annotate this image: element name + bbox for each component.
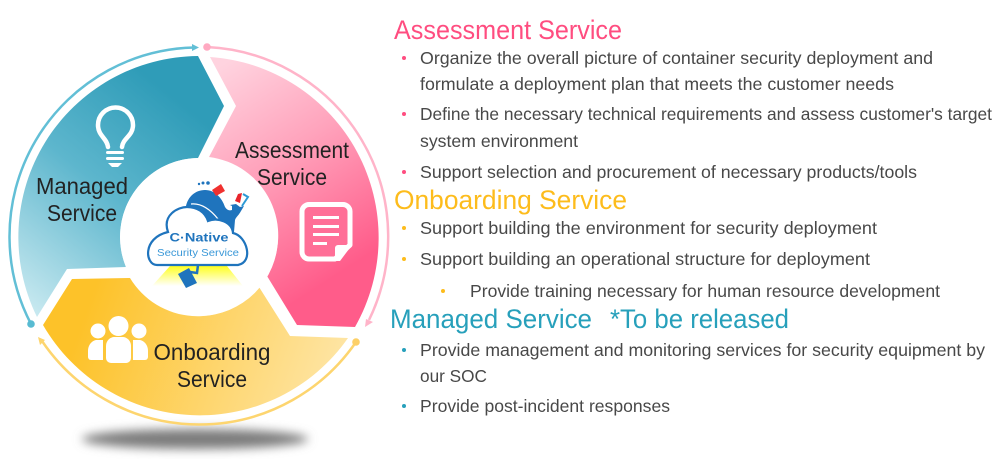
center white circle <box>120 158 278 316</box>
siren <box>212 184 225 196</box>
heading: Assessment Service <box>394 15 622 45</box>
bullet list <box>402 218 940 301</box>
arrow: pink ring <box>203 43 388 327</box>
bullet list: system environment <box>420 131 578 151</box>
segment: managed service <box>18 56 224 317</box>
bullet list: Support selection and procurement of necessary products/tools <box>420 162 917 182</box>
label: assessment service: Service <box>257 164 327 190</box>
bullet list: Provide training necessary for human resource development <box>470 281 940 301</box>
cycle diagram <box>9 43 388 449</box>
section: assessment service <box>394 15 992 182</box>
bullet list: Define the necessary technical requirements and assess customer's target <box>420 104 992 124</box>
logo: c-native security service <box>148 181 248 288</box>
heading: *To be released <box>610 304 789 334</box>
bullet list: our SOC <box>420 366 487 386</box>
icon: light bulb <box>98 108 133 167</box>
label: onboarding service <box>154 339 270 392</box>
arrow: blue ring <box>9 44 199 328</box>
label: assessment service <box>235 137 350 190</box>
section: managed service <box>390 304 985 416</box>
label: managed service: Managed <box>36 173 128 199</box>
heading <box>390 304 789 334</box>
shield <box>235 193 248 206</box>
section: onboarding service <box>394 185 940 301</box>
arrow: yellow ring <box>38 337 360 424</box>
bullet list: Support building the environment for security deployment <box>420 218 877 238</box>
segment: assessment service <box>209 57 379 327</box>
segment: onboarding service <box>43 278 348 415</box>
label: onboarding service: Service <box>177 366 247 392</box>
label: managed service <box>36 173 128 226</box>
ground shadow <box>82 429 308 449</box>
icon: document <box>302 204 352 261</box>
whale mouth line <box>191 204 218 219</box>
logo wordmark: C·Native <box>170 230 229 244</box>
heading: Onboarding Service <box>394 185 627 215</box>
label: assessment service: Assessment <box>235 137 350 163</box>
camera robot <box>178 265 198 288</box>
bullet list: Provide management and monitoring services for security equipment by <box>420 340 985 360</box>
cloud outline <box>148 207 247 265</box>
icon: people <box>88 316 148 363</box>
bullet list: Organize the overall picture of container security deployment and <box>420 48 933 68</box>
water dots <box>198 181 210 185</box>
bullet list: Support building an operational structure for deployment <box>420 249 870 269</box>
bullet list <box>402 48 992 182</box>
yellow light beam <box>152 266 243 286</box>
bullet list: Provide post-incident responses <box>420 396 670 416</box>
label: managed service: Service <box>47 200 117 226</box>
heading: Managed Service <box>390 304 592 334</box>
bullet list <box>402 340 985 416</box>
bullet list: formulate a deployment plan that meets the customer needs <box>420 74 894 94</box>
logo subtitle: Security Service <box>157 247 239 259</box>
whale <box>186 190 244 232</box>
label: onboarding service: Onboarding <box>154 339 270 365</box>
